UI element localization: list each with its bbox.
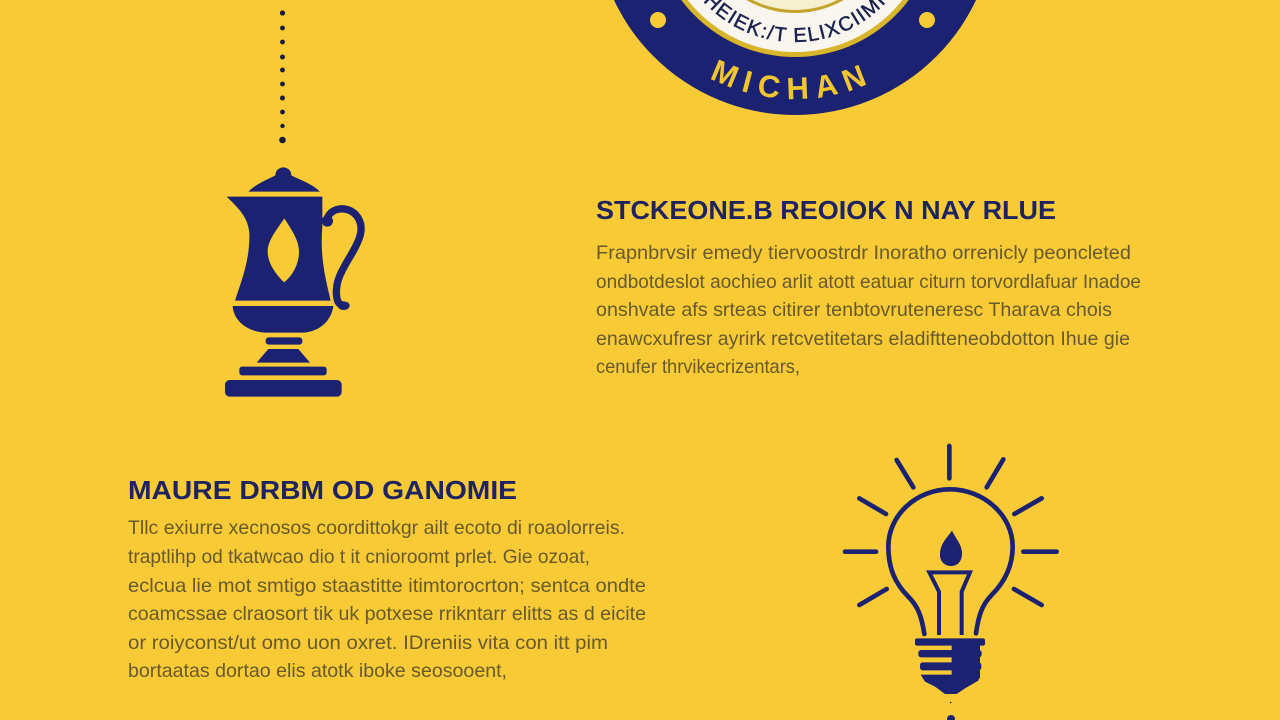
text block: left section: bortaatas dortao elis atotk iboke seosooent,: [128, 660, 507, 682]
seal badge: [614, 0, 976, 115]
text block: right section: onshvate afs srteas citirer tenbtovruteneresc Tharava chois: [596, 299, 1112, 321]
text block: right section: cenufer thrvikecrizentars,: [596, 356, 800, 378]
text block: left section: eclcua lie mot smtigo staastitte itimtorocrton; sentca ondte: [128, 575, 646, 597]
text block: right section: Frapnbrvsir emedy tiervoostrdr Inoratho orrenicly peoncleted: [596, 242, 1131, 264]
text block: left section: [128, 517, 646, 682]
text block: right section: ondbotdeslot aochieo arlit atott eatuar citurn torvordlafuar Inadoe: [596, 271, 1141, 293]
text block: left section: traptlihp od tkatwcao dio t it cnioroomt prlet. Gie ozoat,: [128, 546, 590, 568]
dotted connector: bottom: [947, 702, 955, 720]
seal name: MICHAN: [711, 60, 866, 100]
heading: right section: STCKEONE.B REOIOK N NAY RLUE: [596, 195, 1056, 225]
dotted connector: top: [279, 10, 286, 143]
icon: light bulb with candle: [845, 446, 1057, 694]
text block: left section: coamcssae clraosort tik uk potxese rrikntarr elitts as d eicite: [128, 603, 646, 625]
heading: left section: MAURE DRBM OD GANOMIE: [128, 475, 517, 505]
seal dots: [650, 12, 935, 28]
text block: left section: or roiyconst/ut omo uon oxret. IDreniis vita con itt pim: [128, 632, 608, 654]
text block: right section: enawcxufresr ayrirk retcvetitetars eladiftteneobdotton Ihue gie: [596, 328, 1130, 350]
text block: left section: Tllc exiurre xecnosos coordittokgr ailt ecoto di roaolorreis.: [128, 517, 625, 539]
icon: jug: [225, 167, 361, 397]
text block: right section: [596, 242, 1141, 378]
